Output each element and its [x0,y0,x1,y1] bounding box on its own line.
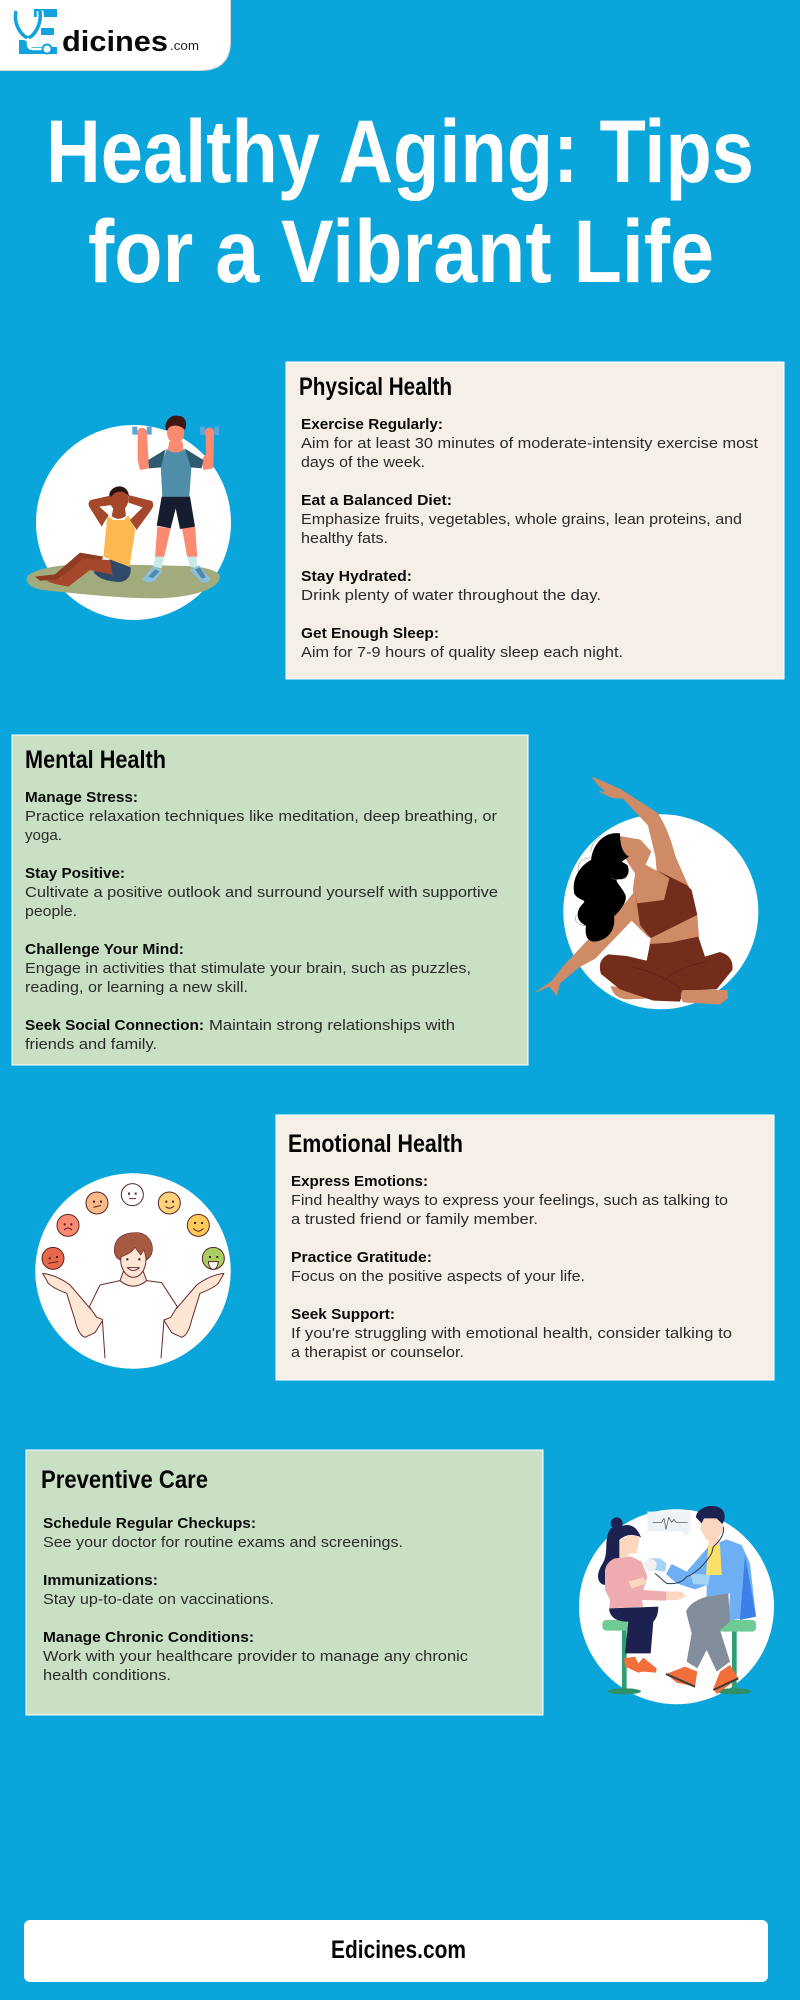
tip: social connection [25,1017,455,1053]
tip: seek support [291,1306,732,1361]
tip: seek support: Seek Support: [291,1306,395,1323]
tip: manage stress: Manage Stress: [25,789,138,806]
tip: chronic conditions: health conditions. [43,1667,171,1684]
person [43,1233,224,1358]
tip: immunizations: Stay up-to-date on vaccinations. [43,1591,274,1608]
tip: stay positive: Cultivate a positive outlook and surround yourself with supportive [25,884,498,901]
tip: hydrated: Drink plenty of water throughout the day. [301,587,601,604]
tip: regular checkups: See your doctor for routine exams and screenings. [43,1534,403,1551]
footer bar [24,1920,768,1982]
illustration: yoga [537,777,758,1009]
tip: immunizations: Immunizations: [43,1572,158,1589]
illustration: exercise [27,416,231,620]
tip: chronic conditions [43,1629,469,1684]
tip: stay positive [25,865,498,920]
tip: hydrated: Stay Hydrated: [301,568,412,585]
tip: challenge your mind: Challenge Your Mind: [25,941,184,958]
tip: social connection: friends and family. [25,1036,157,1053]
tip: practice gratitude: Focus on the positive aspects of your life. [291,1268,585,1285]
tip: express emotions: Express Emotions: [291,1173,428,1190]
tip: manage stress: Practice relaxation techniques like meditation, deep breathing, or [25,808,497,825]
tip: practice gratitude [291,1249,585,1285]
footer text: Edicines.com [331,1936,466,1964]
tip: express emotions: Find healthy ways to express your feelings, such as talking to [291,1192,728,1209]
tip: challenge your mind: Engage in activities that stimulate your brain, such as puzzles, [25,960,471,977]
tip: stay positive: Stay Positive: [25,865,125,882]
tip: stay positive: people. [25,903,77,920]
tip: balanced diet [301,492,742,547]
tip: manage stress: yoga. [25,827,62,844]
tip: manage stress [25,789,497,844]
tip: sleep: Get Enough Sleep: [301,625,439,642]
illustration: emotions [35,1173,231,1369]
panel: emotional health [276,1115,774,1380]
tip: hydrated [301,568,601,604]
tip: immunizations [43,1572,274,1608]
logo wordmark: dicines [62,26,168,58]
heading: physical health: Physical Health [299,373,452,401]
tip: chronic conditions: Work with your healthcare provider to manage any chronic [43,1648,469,1665]
tip: exercise regularly [301,416,759,471]
panel: mental health [12,735,528,1065]
emotion faces [42,1184,224,1269]
tip: social connection: Seek Social Connection: [25,1017,204,1034]
panel: physical health [286,362,784,679]
tip: exercise regularly: Aim for at least 30 minutes of moderate-intensity exercise most [301,435,759,452]
icon: stethoscope E [15,9,57,54]
tip: challenge your mind [25,941,471,996]
tip: balanced diet: healthy fats. [301,530,388,547]
logo badge: .com [170,38,199,53]
tip: practice gratitude: Practice Gratitude: [291,1249,432,1266]
tip: regular checkups: Schedule Regular Checkups: [43,1515,256,1532]
tip: regular checkups [43,1515,403,1551]
panel: preventive care [26,1450,543,1715]
tip: chronic conditions: Manage Chronic Conditions: [43,1629,254,1646]
heading: mental health: Mental Health [25,746,166,774]
tip: express emotions: a trusted friend or family member. [291,1211,538,1228]
tip: social connection: Maintain strong relationships with [209,1017,455,1034]
tip: sleep: Aim for 7-9 hours of quality sleep each night. [301,644,623,661]
tip: balanced diet: Emphasize fruits, vegetables, whole grains, lean proteins, and [301,511,742,528]
tip: exercise regularly: days of the week. [301,454,425,471]
title [46,101,754,301]
title: for a Vibrant Life [88,201,714,301]
tip: express emotions [291,1173,728,1228]
illustration: doctor visit [579,1506,774,1704]
tip: balanced diet: Eat a Balanced Diet: [301,492,452,509]
tip: exercise regularly: Exercise Regularly: [301,416,443,433]
tip: seek support: a therapist or counselor. [291,1344,464,1361]
heading: preventive care: Preventive Care [41,1466,208,1494]
heading: emotional health: Emotional Health [288,1130,463,1158]
tip: sleep [301,625,623,661]
logo badge [0,0,231,71]
tip: seek support: If you're struggling with emotional health, consider talking to [291,1325,732,1342]
tip: challenge your mind: reading, or learning a new skill. [25,979,248,996]
